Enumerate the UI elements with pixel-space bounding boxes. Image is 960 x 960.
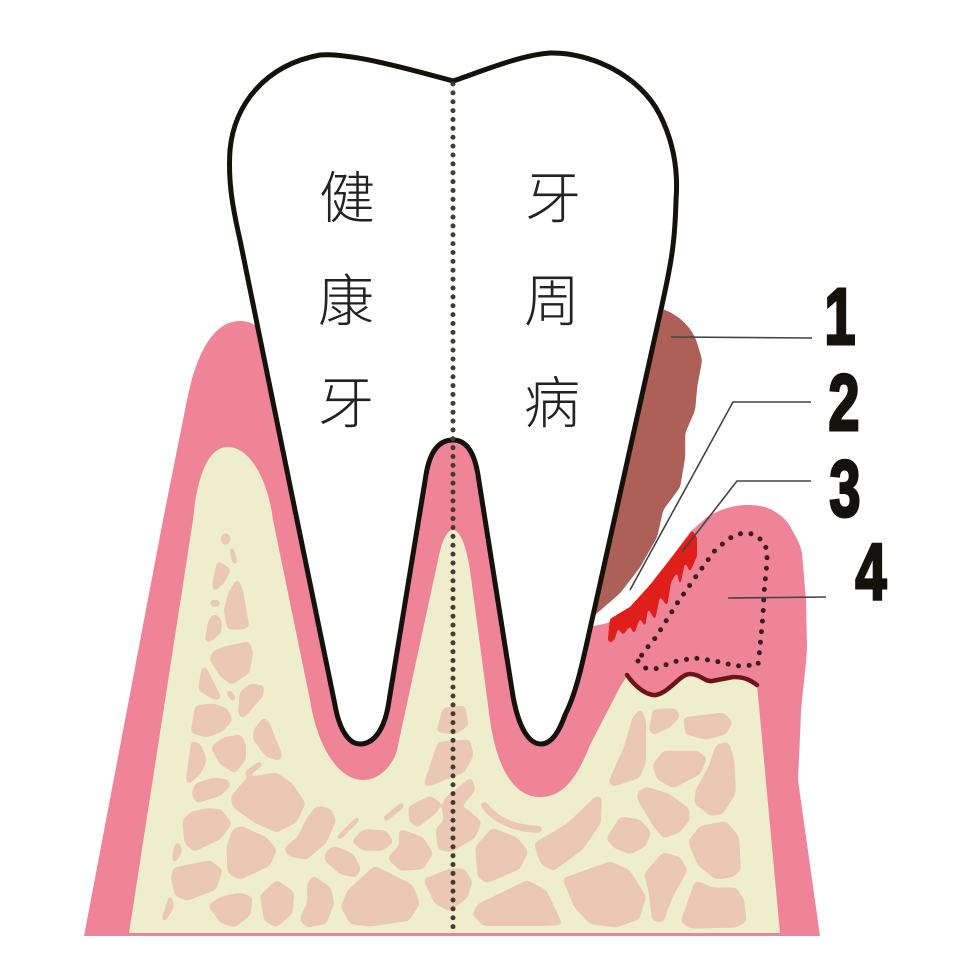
heading: healthy tooth: 健 [319, 167, 375, 230]
centre dotted divider [450, 84, 456, 935]
bone cells: left side [163, 533, 439, 926]
label 4: 4 [855, 526, 887, 616]
bone cells: right side [474, 710, 745, 927]
label 1: 1 [824, 271, 856, 361]
heading: healthy tooth: 康 [318, 270, 374, 333]
alveolar bone [129, 447, 780, 933]
bone cells [163, 533, 745, 927]
heading: periodontal disease [524, 167, 581, 435]
calculus deposit [590, 308, 702, 618]
gum line of receded bone [627, 674, 757, 695]
label 3: 3 [829, 443, 861, 533]
leader line 1 [671, 337, 812, 338]
leader line 2 [630, 402, 811, 590]
dotted boundary of inflamed gum area [638, 533, 767, 669]
leader line 3 [682, 481, 811, 552]
heading: healthy tooth [318, 167, 375, 435]
gum tissue [84, 200, 820, 936]
heading: healthy tooth: 牙 [318, 372, 374, 435]
leader line 4 [728, 597, 826, 598]
bone cells: along the centre line [425, 707, 480, 910]
label 2: 2 [828, 357, 860, 447]
heading: periodontal disease: 周 [524, 270, 580, 333]
inflamed bleeding pocket lining [608, 530, 697, 642]
heading: periodontal disease: 病 [524, 372, 580, 435]
tooth outline [229, 53, 677, 744]
heading: periodontal disease: 牙 [525, 167, 581, 230]
